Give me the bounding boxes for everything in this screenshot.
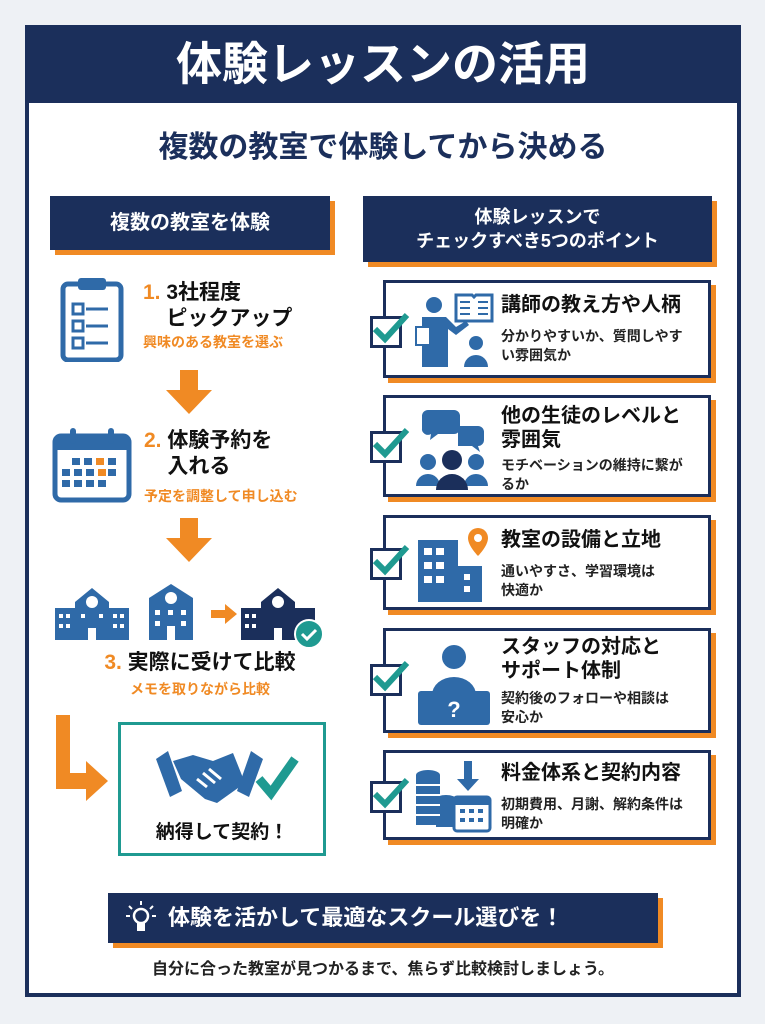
- icon: school buildings: [55, 584, 322, 647]
- card 4: 安心か: [501, 709, 543, 725]
- step 3 text: 3. 実際に受けて比較: [104, 651, 296, 674]
- step 3 text: メモを取りながら比較: [130, 681, 270, 697]
- icon: building with pin: [418, 528, 488, 602]
- step 2: [52, 428, 298, 504]
- card 5 text: 料金体系と契約内容: [501, 762, 681, 784]
- step 2 text: [144, 428, 298, 504]
- card 1: 分かりやすいか、質問しやすい雰囲気か: [501, 328, 683, 363]
- final text: 納得して契約！: [156, 822, 288, 843]
- card 3: 快適か: [501, 582, 543, 598]
- right header: [363, 196, 712, 262]
- step 1 text: 興味のある教室を選ぶ: [143, 334, 283, 350]
- icon: students: [416, 410, 488, 490]
- card 2: [383, 395, 711, 497]
- card 2: モチベーションの維持に繋がるか: [501, 457, 683, 492]
- step 2 text: 2. 体験予約を: [144, 429, 272, 452]
- bottom banner: [108, 893, 658, 943]
- subtitle: 複数の教室で体験してから決める: [158, 131, 608, 164]
- final box: [118, 722, 326, 856]
- step 1 text: [143, 280, 292, 350]
- left header: [50, 196, 330, 250]
- arrow 1: [166, 370, 212, 414]
- left header: 複数の教室を体験: [110, 212, 270, 234]
- icon: staff desk: [418, 645, 490, 725]
- card 5: 初期費用、月謝、解約条件は: [501, 796, 683, 812]
- arrow: L bend: [56, 715, 108, 801]
- step 1 text: ピックアップ: [166, 307, 292, 330]
- step 1: [60, 278, 292, 362]
- step 3 text: [104, 650, 296, 697]
- card 4: 契約後のフォローや相談は: [501, 690, 669, 706]
- card 4 text: [501, 636, 661, 682]
- card 3: [383, 515, 711, 610]
- icon: lightbulb: [126, 901, 156, 931]
- title: 体験レッスンの活用: [176, 38, 590, 90]
- card 3: 通いやすさ、学習環境は: [501, 563, 655, 579]
- icon: calendar: [52, 428, 132, 502]
- icon: clipboard: [60, 278, 124, 362]
- card 1 text: 講師の教え方や人柄: [501, 294, 681, 316]
- step 2 text: 予定を調整して申し込む: [144, 488, 298, 504]
- icon: teacher: [415, 294, 494, 367]
- card 4: [383, 628, 711, 733]
- card 4 text: サポート体制: [501, 660, 621, 682]
- card 4 text: スタッフの対応と: [501, 636, 661, 658]
- icon: staff desk: ?: [447, 697, 461, 722]
- step 2 text: 入れる: [167, 455, 230, 478]
- footer text: 自分に合った教室が見つかるまで、焦らず比較検討しましょう。: [152, 961, 614, 978]
- card 5: 明確か: [501, 815, 543, 831]
- card 5: [383, 750, 711, 840]
- step 1 text: 1. 3社程度: [143, 281, 241, 304]
- right header: 体験レッスンで: [474, 207, 600, 227]
- right header: チェックすべき5つのポイント: [416, 231, 659, 251]
- card 1: [383, 280, 711, 378]
- icon: coins + calendar: [416, 761, 492, 832]
- bottom banner: 体験を活かして最適なスクール選びを！: [168, 905, 563, 930]
- card 2 text: 他の生徒のレベルと雰囲気: [501, 405, 681, 451]
- card 3 text: 教室の設備と立地: [501, 529, 661, 551]
- icon: handshake + check: [156, 751, 299, 803]
- arrow 2: [166, 518, 212, 562]
- title: [25, 25, 741, 103]
